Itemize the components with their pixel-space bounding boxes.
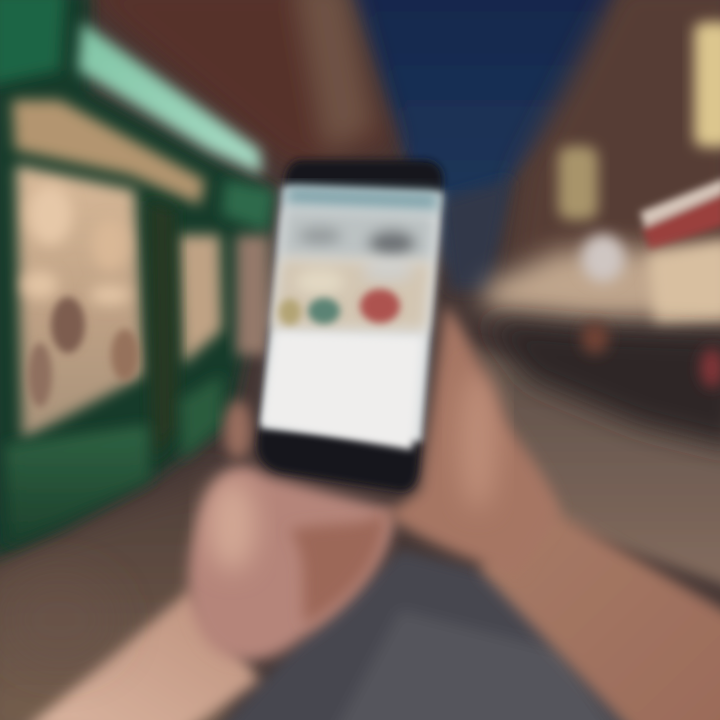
grey paved street in the foreground (210, 550, 700, 720)
phone: image row (280, 208, 436, 262)
left arm and hand (25, 400, 395, 720)
left brick building (70, 0, 395, 170)
right shops: dark parked cars (485, 320, 720, 450)
storefront: green side sign (222, 180, 275, 232)
phone: teal header (284, 186, 440, 212)
storefront: large lit window (16, 165, 145, 440)
left palm (188, 466, 395, 661)
right shops: red tail light (581, 322, 720, 388)
right palm and fingers (385, 305, 560, 575)
right arm and hand (385, 305, 720, 720)
storefront: far windows (236, 235, 270, 355)
phone: colored product thumbnails (279, 289, 400, 325)
green storefront (0, 0, 275, 560)
storefront: green lower wall (5, 375, 222, 545)
right shops: white sign (581, 234, 625, 282)
right shops: small lit window (558, 146, 598, 220)
storefront: door pillar (148, 200, 178, 460)
finger behind the phone (224, 400, 252, 460)
storefront: mint shop sign (78, 22, 262, 175)
phone: white text panel (263, 333, 421, 450)
left hand shadow (290, 510, 385, 625)
right shops (485, 22, 720, 450)
phone: screen base (260, 186, 443, 442)
right forearm (480, 490, 720, 720)
storefront: cream awning (12, 100, 205, 205)
left hand highlight (208, 479, 256, 571)
foreground vignette (0, 570, 120, 670)
left forearm (25, 590, 260, 720)
phone: product row (272, 258, 432, 330)
right shops: glowing upper window (694, 22, 720, 147)
phone: dark body (258, 160, 443, 491)
storefront: figures in window (28, 297, 139, 407)
right shops: cream storefront band (485, 245, 720, 320)
right hand highlight (458, 370, 498, 510)
left sidewalk (0, 470, 260, 720)
storefront: window highlights (22, 185, 130, 305)
distant street end (440, 180, 510, 290)
smartphone (258, 160, 443, 491)
storefront: second window (178, 235, 222, 365)
right brick building (505, 0, 720, 270)
storefront: bright corner (0, 0, 65, 85)
right shops: bright shop front (648, 240, 720, 325)
storefront: dark green frame (0, 0, 270, 560)
night sky (345, 0, 625, 270)
right shops: red and white awning (640, 178, 720, 250)
road on the right (470, 345, 720, 590)
